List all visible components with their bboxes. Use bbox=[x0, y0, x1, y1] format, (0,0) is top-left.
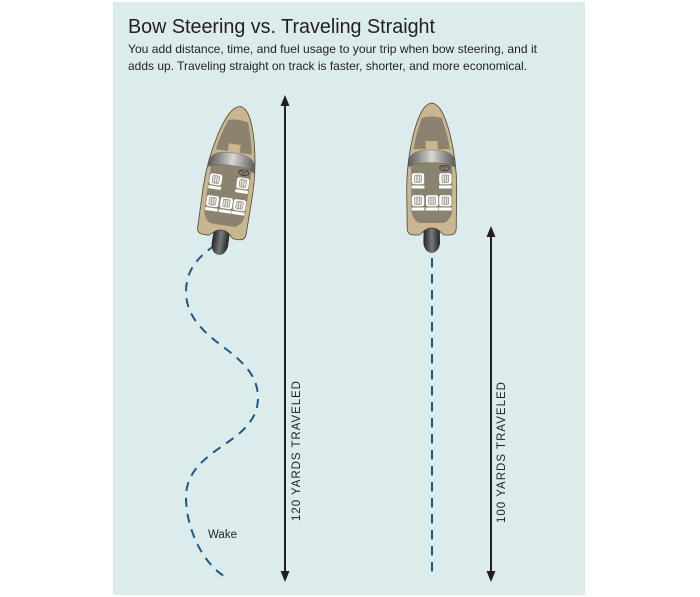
title: Bow Steering vs. Traveling Straight bbox=[128, 16, 435, 38]
arrow: 100 yards bbox=[486, 226, 496, 582]
panel background bbox=[113, 2, 585, 595]
wake: straight path bbox=[431, 258, 433, 577]
boat: bow steering bbox=[194, 103, 265, 259]
label: 100 yards traveled: 100 YARDS TRAVELED bbox=[496, 382, 508, 523]
label: 120 yards traveled: 120 YARDS TRAVELED bbox=[291, 381, 303, 521]
intro text: adds up. Traveling straight on track is faster, shorter, and more economical. bbox=[128, 59, 527, 73]
wake: bow steering path bbox=[186, 245, 258, 576]
intro text bbox=[128, 42, 538, 73]
intro text: You add distance, time, and fuel usage to your trip when bow steering, and it bbox=[128, 42, 538, 56]
arrow: 120 yards bbox=[280, 95, 290, 582]
boat: traveling straight bbox=[407, 103, 457, 253]
wake label: Wake bbox=[208, 529, 237, 541]
